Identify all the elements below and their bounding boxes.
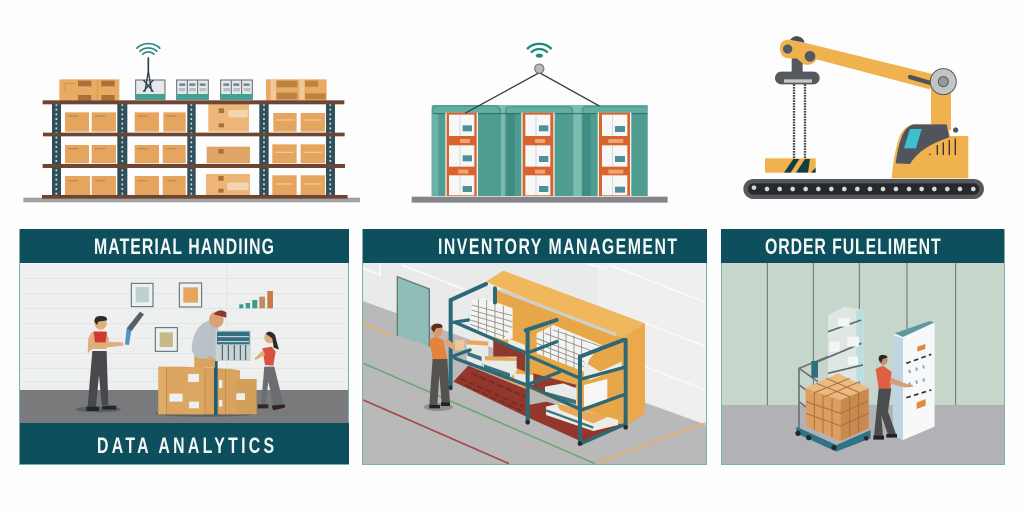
panel art bbox=[721, 263, 1005, 464]
conveyor belt bbox=[743, 179, 984, 199]
floor bbox=[20, 390, 349, 423]
warehouse wall bbox=[363, 263, 707, 464]
cart frame bbox=[799, 357, 828, 428]
illustration: robotic crane on conveyor bbox=[743, 36, 984, 199]
heading: inventory management: INVENTORY MANAGEMENT bbox=[438, 236, 677, 260]
green wall bbox=[721, 263, 1005, 405]
wrapped goods tower bbox=[818, 307, 863, 382]
top shelf scanners bbox=[136, 71, 252, 99]
hoist lines bbox=[465, 73, 599, 113]
door bbox=[397, 277, 429, 347]
rack uprights bbox=[52, 102, 335, 197]
panel: material handling bbox=[20, 229, 349, 464]
crane body bbox=[892, 124, 968, 178]
teal cabinets bbox=[432, 105, 648, 196]
rack back and canopy bbox=[486, 271, 645, 428]
warehouse floor bbox=[363, 301, 707, 464]
panel: inventory management bbox=[362, 229, 707, 464]
wall bar chart bbox=[239, 291, 273, 308]
illustration: pallet racking with boxes bbox=[23, 44, 360, 202]
panel frame bbox=[722, 230, 1004, 464]
crane arm bbox=[780, 40, 937, 89]
stacked white cartons bbox=[467, 298, 622, 431]
woman bbox=[254, 332, 285, 410]
heading: data analytics: DATA ANALYTICS bbox=[97, 435, 274, 459]
header bar bbox=[721, 229, 1004, 263]
hoist ring bbox=[535, 64, 544, 73]
header bar bbox=[363, 229, 707, 263]
worker with scanner bbox=[76, 312, 144, 412]
order worker bbox=[873, 355, 913, 440]
panel art bbox=[363, 263, 707, 464]
stacked boxes bbox=[155, 360, 257, 417]
crane column bbox=[931, 80, 951, 130]
illustration: teal storage units bbox=[412, 44, 668, 203]
kiosk terminal bbox=[893, 321, 935, 440]
rack lower red deck bbox=[453, 340, 623, 442]
back wall bbox=[20, 263, 349, 390]
floor lines bbox=[363, 323, 705, 464]
panel art bbox=[20, 263, 349, 423]
row boxes bbox=[65, 103, 325, 195]
storage floor bbox=[412, 197, 668, 203]
man with tablet bbox=[192, 310, 251, 368]
crane chains bbox=[794, 84, 805, 158]
rack shelves bbox=[42, 100, 348, 199]
rack floor bbox=[23, 198, 360, 202]
crane pulley bbox=[930, 69, 956, 95]
top shelf boxes bbox=[59, 79, 327, 100]
icon: wifi on hoist bbox=[527, 44, 552, 58]
cart base bbox=[795, 427, 871, 452]
carton pallet bbox=[805, 373, 869, 441]
crane cargo block bbox=[765, 158, 816, 173]
panel frame bbox=[20, 230, 348, 464]
box labels bbox=[68, 108, 322, 193]
footer bar bbox=[20, 423, 349, 464]
heading: order fulfilment: ORDER FULELIMENT bbox=[765, 236, 941, 260]
icon: wifi on rack bbox=[136, 44, 160, 72]
rack wheels bbox=[448, 386, 628, 446]
panel: order fulfilment bbox=[721, 229, 1005, 464]
grey floor bbox=[721, 405, 1005, 464]
teal rack frame bbox=[451, 284, 626, 443]
cabinet labels bbox=[445, 113, 631, 196]
panel frame bbox=[362, 230, 706, 464]
crane mast and gripper bbox=[775, 36, 820, 84]
wall pictures bbox=[131, 283, 202, 351]
header bar bbox=[20, 229, 349, 263]
inventory worker bbox=[424, 324, 464, 411]
heading: material handling: MATERIAL HANDIING bbox=[94, 236, 274, 260]
